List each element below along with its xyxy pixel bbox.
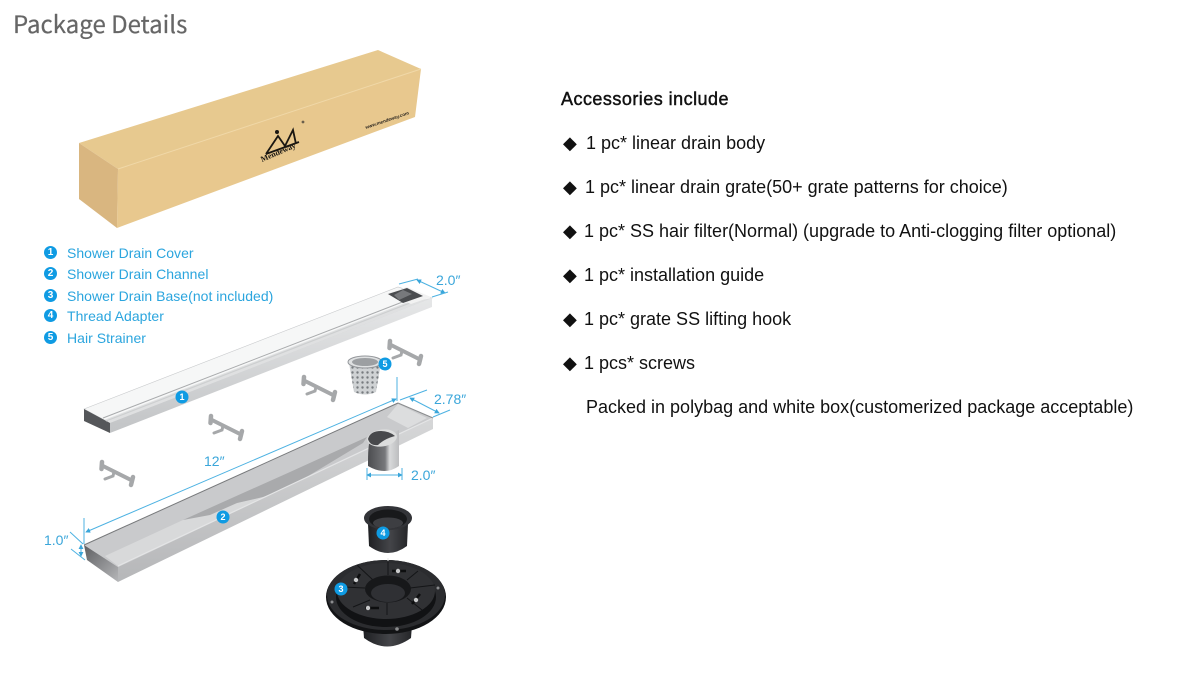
accessories list: Accessories include [561, 89, 729, 109]
text: 3 [48, 290, 53, 301]
part number badges: 5 [382, 359, 388, 369]
accessories list: ◆ [563, 265, 577, 285]
accessories list: 1 pcs* screws [584, 353, 695, 373]
dimension labels: 1.0″ [44, 532, 68, 548]
thread adapter [364, 506, 412, 553]
parts legend [44, 245, 273, 346]
text: 2 [48, 268, 53, 279]
dimension lines [70, 279, 450, 560]
accessories list: ◆ [563, 353, 577, 373]
box logo: Mendeway [259, 141, 297, 164]
drain channel [84, 403, 433, 582]
accessories list: Packed in polybag and white box(customerized package acceptable) [586, 397, 1133, 417]
box logo [259, 121, 304, 164]
accessories list: ◆ [563, 309, 577, 329]
part number badges: 4 [380, 528, 386, 538]
accessories list: 1 pc* grate SS lifting hook [584, 309, 791, 329]
accessories list: 1 pc* linear drain body [586, 133, 765, 153]
text: Hair Strainer [67, 330, 146, 346]
title: Package Details [13, 5, 187, 40]
text: Shower Drain Channel [67, 266, 208, 282]
text: 1 [48, 247, 53, 258]
accessories list: 1 pc* installation guide [584, 265, 764, 285]
part number badges: 2 [220, 512, 226, 522]
dimension labels: 2.0″ [436, 272, 460, 288]
dimension labels: 2.0″ [411, 467, 435, 483]
accessories list: ◆ [563, 177, 577, 197]
shower drain base [326, 558, 446, 646]
text: 4 [48, 310, 53, 321]
accessories list: ◆ [563, 133, 577, 153]
box website: www.mendeway.com [364, 110, 410, 130]
dimension labels: 2.78″ [434, 391, 466, 407]
part number badges: 3 [338, 584, 344, 594]
accessories list: 1 pc* linear drain grate(50+ grate patterns for choice) [585, 177, 1008, 197]
cardboard package box [79, 50, 421, 228]
text: Thread Adapter [67, 308, 164, 324]
dimension labels [44, 272, 466, 548]
drain outlet [368, 430, 399, 471]
dimension labels: 12″ [204, 453, 225, 469]
hair strainer [348, 356, 382, 394]
text: Shower Drain Base(not included) [67, 288, 273, 304]
part number badges [176, 358, 392, 596]
text: 5 [48, 332, 53, 343]
accessories list: ◆ [563, 221, 577, 241]
drain cover [84, 287, 432, 433]
part number badges: 1 [179, 392, 185, 402]
text: Shower Drain Cover [67, 245, 194, 261]
mounting clips [102, 341, 421, 485]
accessories list: 1 pc* SS hair filter(Normal) (upgrade to Anti-clogging filter optional) [584, 221, 1116, 241]
